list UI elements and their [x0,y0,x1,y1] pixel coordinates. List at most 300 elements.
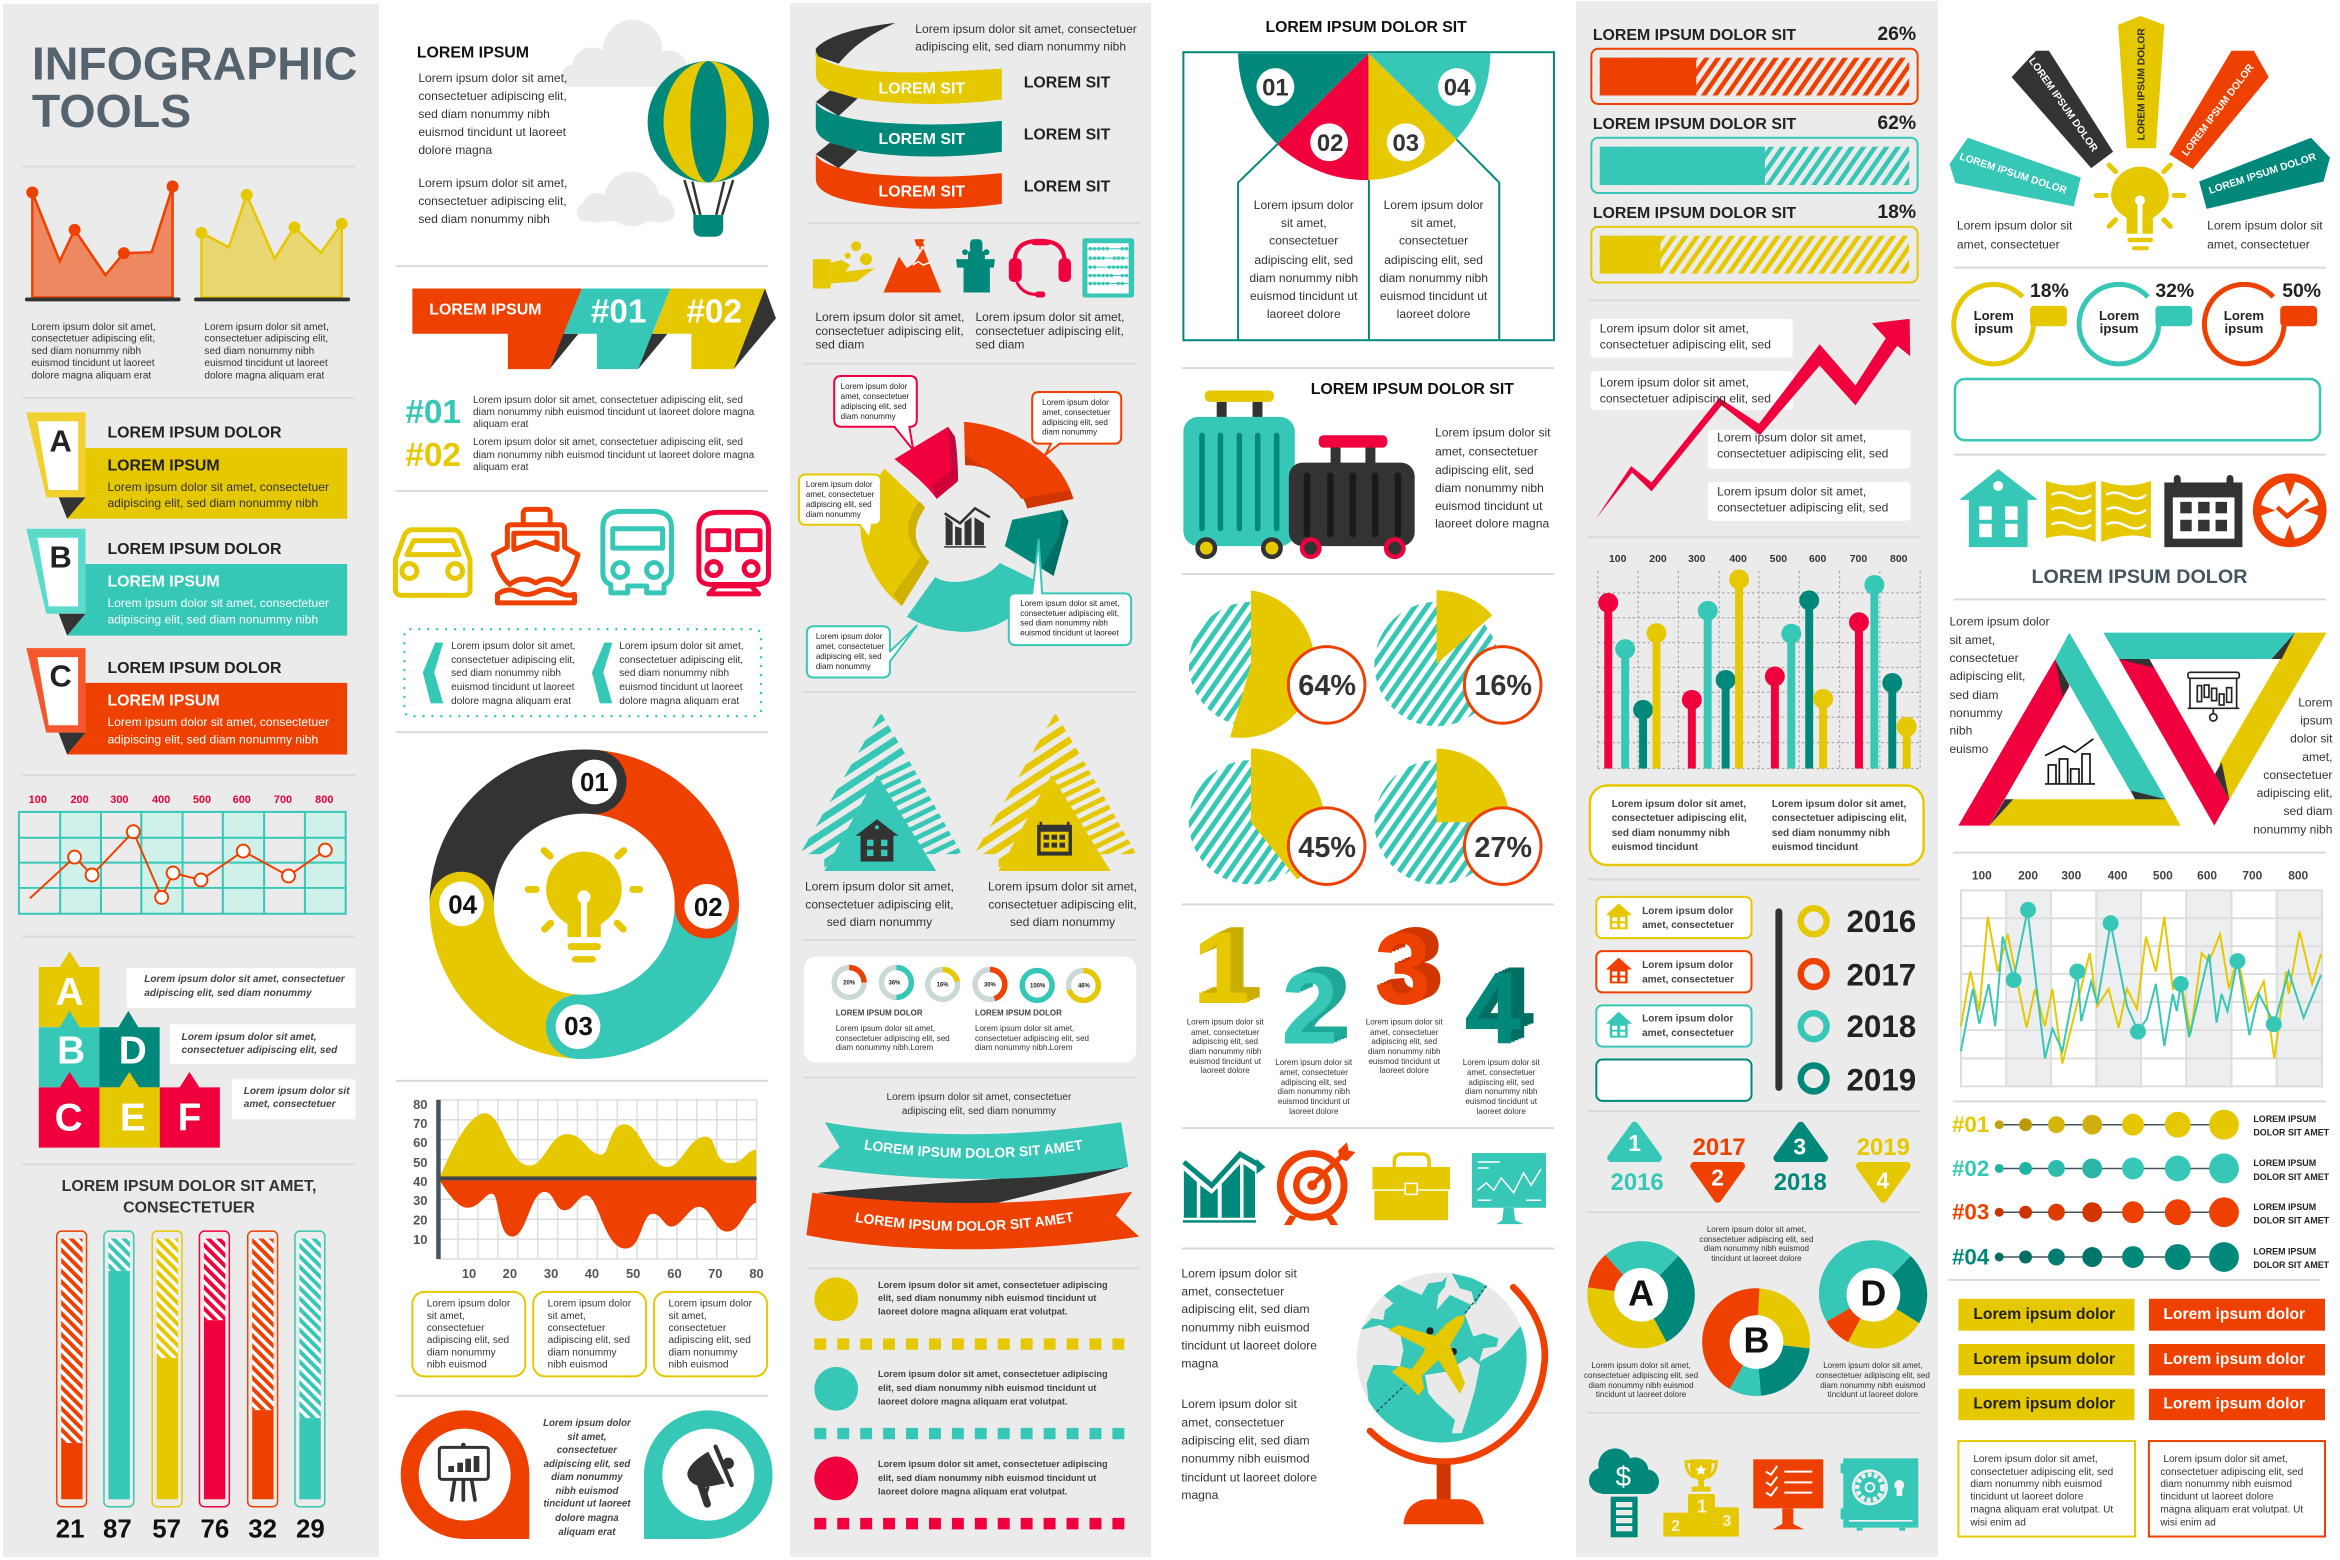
text block: #01 #02: aliquam erat [473,462,529,473]
text: triangle captions: sed diam nonummy [1010,915,1116,929]
text box: yellow outline wide: Lorem ipsum dolor sit amet, [1612,799,1746,810]
ribbon: lorem ipsum #01 #02 [412,288,776,369]
area chart: mirrored yellow and red: 80 [749,1266,764,1281]
numbered steps: 3D numerals: Lorem ipsum dolor sit [1187,1018,1264,1027]
icon: calendar [1037,822,1072,856]
bar chart: vertical striped bars: 76 [200,1516,229,1544]
text boxes: yellow outlined: diam nonummy [427,1347,497,1358]
icon: teal suitcase [1183,390,1295,559]
donut B [1702,1288,1810,1396]
callouts: ring labels: Lorem ipsum dolor sit amet, [1020,599,1120,608]
lollipop chart: 500 [1770,554,1787,565]
year triangles: 1 [1628,1130,1641,1156]
callouts: ring labels: amet, consectetuer [816,642,885,651]
icon: cloud with dollar and ladder: $ [1616,1461,1632,1492]
line chart: yellow and teal [1961,868,2322,1086]
panel: semicircle pie: euismod tincidunt ut [1380,289,1488,303]
text: area chart captions: consectetuer adipiscing elit, [31,334,155,345]
icon: car [395,530,470,595]
numbered steps: 3D numerals: Lorem ipsum dolor sit [1463,1058,1540,1067]
text: between pins: dolore magna [555,1513,619,1524]
fan of labels around bulb: amet, consectetuer [1957,238,2060,252]
text: donut captions: consectetuer adipiscing elit, sed [1584,1371,1698,1380]
buttons: red: Lorem ipsum dolor [2163,1396,2305,1413]
callouts: ring labels: diam nonummy [806,510,861,519]
numbered steps: 3D numerals: 3 [1374,912,1431,1026]
icon: open book [2046,481,2151,542]
panel: small donuts: LOREM IPSUM DOLOR [836,1008,923,1017]
panel: semicircle pie: consectetuer [1399,234,1468,248]
panel: semicircle pie: 02 [1317,130,1343,157]
numbered steps: 3D numerals: adipiscing elit, sed [1468,1078,1534,1087]
text: triangle captions: Lorem ipsum dolor sit amet, [805,879,954,893]
lollipop chart [1598,554,1920,768]
ribbon: lorem ipsum #01 #02: #02 [686,293,742,330]
numbered steps: 3D numerals: amet, consectetuer [1191,1028,1260,1037]
tile: lower columns 5 and 6 [1584,785,2330,1537]
panel: semicircle pie: laoreet dolore [1397,307,1471,321]
panel: small donuts: Lorem ipsum dolor sit amet, [975,1024,1074,1033]
area chart: mirrored yellow and red: 30 [413,1193,427,1208]
text boxes: yellow outlined: diam nonummy [548,1347,617,1358]
note box: red: magna aliquam erat volutpat. Ut [2160,1505,2303,1516]
text: spiral ribbon intro: adipiscing elit, sed diam nonummy nibh [915,40,1126,54]
timeline: #04: LOREM IPSUM [2253,1247,2316,1257]
chart: letter blocks: D [119,1030,147,1073]
donut D [1819,1240,1927,1349]
text: balloon description: sed diam nonummy nibh [418,212,550,226]
text: triangle right: sed diam [2283,804,2332,818]
panel: dotted box with chevrons: euismod tincidunt ut laoreet [451,682,575,693]
heading: luggage: LOREM IPSUM DOLOR SIT [1311,381,1514,398]
text: donuts top: diam nonummy nibh euismod [1704,1244,1809,1253]
text: area chart captions: dolore magna aliquam erat [204,371,325,382]
callouts: ring labels: adipiscing elit, sed [1042,418,1108,427]
note box: red: consectetuer adipiscing elit, sed [2160,1467,2303,1478]
numbered steps: 3D numerals: euismod tincidunt ut [1278,1097,1350,1106]
icon: train [699,512,768,594]
numbered steps: 3D numerals: 2 [1281,952,1338,1066]
text boxes and rising arrow: Lorem ipsum dolor sit amet, [1600,321,1749,335]
numbered steps: 3D numerals: 1 [1203,906,1259,1020]
panel: small donuts: 100% [1030,983,1046,989]
icon: clock [2257,478,2323,543]
area chart: mirrored yellow and red: 30 [544,1266,558,1281]
text: globe description: Lorem ipsum dolor sit [1181,1397,1298,1411]
text: between pins: tincidunt ut laoreet [543,1499,631,1510]
list: house labels: amet, consectetuer [1642,974,1734,985]
progress bars: 26% [1877,23,1916,45]
bar chart: vertical striped bars: 29 [296,1516,325,1544]
callouts: ring labels: diam nonummy [1042,428,1097,437]
callouts: ring labels: adipiscing elit, sed [806,500,872,509]
panel: small donuts: LOREM IPSUM DOLOR [975,1008,1062,1017]
numbered steps: 3D numerals: adipiscing elit, sed [1192,1037,1258,1046]
numbered steps: 3D numerals: euismod tincidunt ut [1465,1097,1538,1106]
numbered steps: 3D numerals: amet, consectetuer [1467,1068,1536,1077]
text box: yellow outline wide: sed diam nonummy nibh [1612,828,1730,839]
text: luggage: laoreet dolore magna [1435,517,1550,531]
area chart: mirrored yellow and red: 10 [413,1232,427,1247]
text: triangle left: nonummy [1949,706,2003,720]
text box: yellow outline wide: euismod tincidunt [1772,842,1859,853]
text boxes and rising arrow: Lorem ipsum dolor sit amet, [1717,484,1866,498]
text: banner intro: adipiscing elit, sed diam nonummy [902,1106,1057,1117]
numbered steps: 3D numerals: 2 [1294,946,1351,1060]
icon: trophy podium: 2 [1671,1518,1680,1535]
list: house labels: amet, consectetuer [1642,920,1734,931]
text block: #01 #02: #01 [405,394,461,431]
callouts: ring labels: diam nonummy [841,412,896,421]
text: area chart captions: Lorem ipsum dolor sit amet, [31,322,156,333]
chart: letter blocks: C [55,1097,83,1140]
text boxes: yellow outlined: adipiscing elit, sed [669,1335,751,1346]
text: between pins: aliquam erat [558,1527,616,1538]
callouts: ring labels: sed diam nonummy nibh [1020,619,1108,628]
numbered steps: 3D numerals: 1 [1196,909,1253,1023]
icon: calendar large [2164,475,2242,547]
note box: red: Lorem ipsum dolor sit amet, [2163,1454,2288,1465]
gauge: 50%: ipsum [2225,321,2263,336]
numbered steps: 3D numerals: 4 [1464,952,1521,1066]
icon: abacus [1082,238,1134,297]
panel: dotted box with chevrons: Lorem ipsum dolor sit amet, [619,641,744,652]
text boxes and rising arrow [1590,319,1911,521]
year triangles: 3 [1793,1134,1806,1160]
ribbon stack: lorem sit: LOREM SIT [878,183,965,200]
gauge: 32% [2079,280,2194,364]
text: triangle right: ipsum [2300,714,2332,728]
panel: dotted box with chevrons: dolore magna aliquam erat [619,696,739,707]
ribbon stack: lorem sit: LOREM SIT [1024,75,1111,92]
text: globe description: amet, consectetuer [1181,1416,1284,1430]
panel: option C: adipiscing elit, sed diam nonummy nibh [107,733,318,747]
panel: small donuts: consectetuer adipiscing elit, sed [836,1034,950,1043]
text: triangle captions: consectetuer adipiscing elit, [988,897,1137,911]
panel: dotted box with chevrons [404,629,761,716]
icon: house [856,819,898,862]
area chart: mirrored yellow and red: 50 [626,1266,640,1281]
progress bars: LOREM IPSUM DOLOR SIT [1593,205,1796,222]
icon: hand with coins [813,241,875,288]
text: donut captions [1584,1361,1930,1399]
numbered steps: 3D numerals: 3 [1381,909,1438,1023]
panel: small donuts: 20% [843,980,856,986]
icon: clouds [562,20,689,226]
year triangles: 2 [1711,1164,1724,1190]
numbered steps: 3D numerals: diam nonummy nibh [1189,1047,1261,1056]
icon: hot air balloon [648,61,769,237]
panel: small donuts: 16% [937,982,949,988]
list: coloured circles with dashes: Lorem ipsum dolor sit amet, consectetuer adipiscing [878,1280,1108,1290]
banners: curved ribbons: LOREM IPSUM DOLOR SIT AMET [864,1140,1082,1158]
ribbon stack: lorem sit: LOREM SIT [878,131,965,148]
note box: yellow: consectetuer adipiscing elit, sed [1970,1467,2113,1478]
area chart: mirrored yellow and red: 70 [708,1266,722,1281]
text: between pins: diam nonummy [551,1472,623,1483]
pie chart: 27% [1374,749,1541,884]
fan of labels around bulb: LOREM IPSUM DOLOR [2026,56,2100,155]
panel: semicircle pie: euismod tincidunt ut [1250,289,1358,303]
timeline: #03: #03 [1952,1200,1989,1225]
text: icon captions [815,310,1125,352]
panel: semicircle pie: laoreet dolore [1267,307,1341,321]
text: spiral ribbon intro: Lorem ipsum dolor sit amet, consectetuer [915,22,1137,36]
numbered steps: 3D numerals: 2 [1291,947,1348,1061]
icon: light bulb [528,851,640,963]
text boxes: letter blocks: Lorem ipsum dolor sit [244,1086,350,1097]
panel: option B [26,529,347,636]
text: triangle right: nonummy nibh [2253,823,2332,837]
bar chart: vertical striped bars: 87 [103,1516,132,1544]
text: globe description: nonummy nibh euismod [1181,1451,1310,1465]
text: balloon description: consectetuer adipiscing elit, [418,89,567,103]
text: luggage: euismod tincidunt ut [1435,499,1543,513]
text: icon captions: sed diam [815,338,864,352]
numbered steps: 3D numerals: 4 [1474,947,1531,1061]
text: triangle left: adipiscing elit, [1949,669,2025,683]
panel: small donuts: diam nonummy nibh.Lorem [836,1043,934,1052]
donut A [1587,1241,1695,1348]
text: area chart captions: dolore magna aliquam erat [31,371,151,382]
text: area chart captions: euismod tincidunt ut laoreet [204,358,328,369]
progress bars: 62% [1877,112,1916,134]
text boxes: yellow outlined: adipiscing elit, sed [548,1335,630,1346]
icon: small bulb [2096,165,2184,250]
buttons: yellow: Lorem ipsum dolor [1973,1306,2115,1323]
panel: semicircle pie: adipiscing elit, sed [1384,253,1483,267]
list: coloured circles with dashes: Lorem ipsum dolor sit amet, consectetuer adipiscing [878,1459,1108,1469]
buttons: yellow: Lorem ipsum dolor [1973,1351,2115,1368]
panel: option C: C [50,658,72,693]
heading: lorem ipsum balloon text: LOREM IPSUM [417,45,529,62]
lollipop chart: 300 [1688,554,1706,565]
area chart: mirrored yellow and red [413,1097,764,1281]
note box: red [2149,1441,2325,1537]
timeline: #04: DOLOR SIT AMET [2253,1260,2330,1270]
text: area chart captions: consectetuer adipiscing elit, [204,334,328,345]
line chart: red on teal grid: 300 [110,794,129,806]
text boxes: yellow outlined: nibh euismod [427,1359,487,1370]
pie chart: 45% [1189,749,1365,884]
text boxes and rising arrow: consectetuer adipiscing elit, sed [1717,447,1888,461]
lollipop chart: 600 [1809,554,1827,565]
numbered steps: 3D numerals: adipiscing elit, sed [1281,1078,1347,1087]
text: luggage: adipiscing elit, sed [1435,463,1534,477]
text: luggage: amet, consectetuer [1435,445,1538,459]
text boxes: yellow outlined: Lorem ipsum dolor [427,1299,511,1310]
panel: option C: Lorem ipsum dolor sit amet, consectetuer [107,715,329,729]
pie chart: 16%: 16% [1474,670,1532,702]
line chart: yellow and teal: 400 [2108,868,2128,882]
text: luggage: diam nonummy nibh [1435,481,1544,495]
panel: small donuts: 30% [984,982,997,988]
gauge: 32%: ipsum [2100,321,2138,336]
panel: semicircle pie: Lorem ipsum dolor [1384,198,1484,212]
text: triangle right: dolor sit [2290,732,2333,746]
text: balloon description: dolore magna [418,143,492,157]
callouts: ring labels: Lorem ipsum dolor [841,382,908,391]
panel: small donuts: Lorem ipsum dolor sit amet, [836,1024,935,1033]
text: area chart captions: Lorem ipsum dolor sit amet, [204,322,329,333]
panel: dotted box with chevrons: consectetuer adipiscing elit, [619,655,743,666]
empty teal box [1955,379,2320,440]
note box: yellow: magna aliquam erat volutpat. Ut [1970,1505,2113,1516]
ribbon: lorem ipsum #01 #02: #01 [591,293,647,330]
text: icon captions: Lorem ipsum dolor sit amet, [975,310,1125,324]
text box: yellow outline wide: consectetuer adipiscing elit, [1612,813,1747,824]
numbered steps: 3D numerals: laoreet dolore [1289,1107,1339,1116]
numbered steps: 3D numerals: laoreet dolore [1201,1066,1250,1075]
fan of labels around bulb: LOREM IPSUM DOLOR [2180,62,2257,158]
title: TOOLS [32,85,191,137]
year triangles: 2017 [1693,1134,1746,1161]
text: triangle left: sit amet, [1949,633,1995,647]
callouts: ring labels: amet, consectetuer [806,490,875,499]
text: donuts top: Lorem ipsum dolor sit amet, [1707,1225,1806,1234]
panel: dotted box with chevrons: dolore magna aliquam erat [451,696,571,707]
note box: yellow: wisi enim ad [1969,1518,2026,1529]
panel: option A: LOREM IPSUM DOLOR [107,425,282,442]
area chart: mirrored yellow and red: 60 [413,1135,427,1150]
text: triangle right: Lorem [2298,695,2332,709]
text: between pins: sit amet, [567,1432,607,1443]
pie chart: 64%: 64% [1298,670,1356,702]
lollipop chart: 400 [1729,554,1747,565]
numbered steps: 3D numerals: amet, consectetuer [1370,1028,1439,1037]
text boxes and rising arrow: consectetuer adipiscing elit, sed [1717,500,1888,514]
line chart: yellow and teal: 600 [2197,868,2217,882]
ribbon stack: lorem sit: LOREM SIT [1024,126,1111,143]
buttons: yellow: Lorem ipsum dolor [1973,1396,2115,1413]
line chart: red on teal grid: 700 [274,794,292,806]
text: between pins: nibh euismod [555,1486,619,1497]
line chart: red on teal grid: 100 [29,794,47,806]
panel: small donuts: 46% [1078,983,1091,989]
bar chart: vertical striped bars: 57 [152,1516,181,1544]
icon: presentation pin [401,1410,529,1539]
text box: yellow outline wide [1590,785,1924,865]
list: coloured circles with dashes: laoreet dolore magna aliquam erat volutpat. [878,1397,1067,1407]
timeline: #02: DOLOR SIT AMET [2253,1172,2330,1182]
text: triangle right: amet, [2302,750,2332,764]
text boxes and rising arrow: consectetuer adipiscing elit, sed [1600,391,1771,405]
numbered steps: 3D numerals: 4 [1471,949,1528,1063]
numbered steps: 3D numerals: 2 [1288,949,1345,1063]
numbered steps: 3D numerals: 2 [1285,950,1342,1064]
list: house labels: Lorem ipsum dolor [1642,906,1733,917]
list: coloured circles with dashes [814,1277,1125,1524]
timeline: #02: LOREM IPSUM [2253,1158,2316,1168]
text: globe description: amet, consectetuer [1181,1284,1284,1298]
callouts: ring labels: adipiscing elit, sed [841,402,906,411]
text: triangle left: sed diam [1949,688,1998,702]
panel: small donuts: 36% [888,980,901,986]
text boxes: yellow outlined: sit amet, [427,1311,465,1322]
numbered steps: 3D numerals: 4 [1477,946,1534,1060]
text: area chart captions [31,322,329,382]
callouts: ring labels: diam nonummy [816,662,871,671]
bar chart: vertical striped bars [56,1231,325,1544]
callouts: ring labels: adipiscing elit, sed [816,652,882,661]
timeline: years: 2018 [1847,1009,1916,1044]
donut chart with bulb [430,750,739,1059]
year triangles: 4 [1876,1167,1889,1193]
text: balloon description: consectetuer adipiscing elit, [418,194,567,208]
timeline: #03: DOLOR SIT AMET [2253,1216,2330,1226]
text: triangle captions: sed diam nonummy [827,915,933,929]
numbered steps: 3D numerals: 3 [1384,907,1441,1021]
icon: candlestick board [2188,672,2239,721]
panel: option A: adipiscing elit, sed diam nonummy nibh [107,496,318,510]
icon: headset [1009,240,1071,297]
gauge: 18%: ipsum [1974,321,2013,336]
chart: letter blocks [39,951,220,1148]
text box: yellow outline wide: euismod tincidunt [1612,842,1699,853]
area chart: red [25,181,181,301]
callouts: ring labels: amet, consectetuer [841,392,909,401]
note box: yellow: Lorem ipsum dolor sit amet, [1973,1454,2098,1465]
ribbon: lorem ipsum #01 #02: LOREM IPSUM [429,301,541,318]
panel: dotted box with chevrons: sed diam nonummy nibh [451,668,561,679]
icon: globe with plane [1340,1273,1545,1524]
list: coloured circles with dashes: elit, sed diam nonummy nibh euismod tincidunt ut [878,1473,1096,1483]
numbered steps: 3D numerals: laoreet dolore [1380,1066,1429,1075]
heading: bars: LOREM IPSUM DOLOR SIT AMET, [62,1178,316,1195]
line chart: yellow and teal: 200 [2018,868,2038,882]
panel: option B: Lorem ipsum dolor sit amet, consectetuer [107,596,329,610]
panel: dotted box with chevrons: euismod tincidunt ut laoreet [619,682,743,693]
numbered steps: 3D numerals: Lorem ipsum dolor sit [1275,1058,1353,1067]
text boxes: yellow outlined: diam nonummy [669,1347,738,1358]
text boxes and rising arrow: Lorem ipsum dolor sit amet, [1717,431,1866,445]
panel: semicircle pie: 01 [1262,75,1289,102]
panel: small donuts [804,957,1136,1063]
icon: ring center bar chart [944,508,990,548]
text block: #01 #02: Lorem ipsum dolor sit amet, consectetuer adipiscing elit, sed [473,437,743,448]
text: globe description: adipiscing elit, sed diam [1181,1434,1310,1448]
numbered steps: 3D numerals [1187,905,1540,1116]
callouts: ring labels: euismod tincidunt ut laoreet [1020,629,1119,638]
callouts: ring labels: Lorem ipsum dolor [806,480,873,489]
numbered steps: 3D numerals: 4 [1468,950,1525,1064]
gauge: 32%: Lorem [2099,308,2139,323]
text boxes: letter blocks: amet, consectetuer [244,1099,337,1110]
ribbon stack: lorem sit: LOREM SIT [1024,178,1111,195]
text: triangle left: euismo [1949,742,1989,756]
timeline: #04 [1952,1242,2330,1272]
numbered steps: 3D numerals: 1 [1200,908,1257,1022]
list: coloured circles with dashes: elit, sed diam nonummy nibh euismod tincidunt ut [878,1383,1096,1393]
buttons: yellow [1958,1299,2134,1420]
panel: dotted box with chevrons: sed diam nonummy nibh [619,668,729,679]
text: between pins: adipiscing elit, sed [544,1459,631,1470]
buttons: red: Lorem ipsum dolor [2163,1351,2305,1368]
text: donut captions: consectetuer adipiscing elit, sed [1816,1371,1930,1380]
text box: yellow outline wide: sed diam nonummy nibh [1772,828,1890,839]
text block: #01 #02: aliquam erat [473,419,529,430]
bar chart: vertical striped bars: 32 [248,1516,277,1544]
icon: monitor [1472,1153,1546,1224]
chart: letter blocks: E [120,1097,146,1140]
timeline: #02: #02 [1952,1156,1989,1181]
text: donut captions: diam nonummy nibh euismod [1589,1381,1694,1390]
line chart: red on teal grid: 200 [70,794,89,806]
icon: safe [1841,1458,1918,1531]
text: triangle left: consectetuer [1949,651,2019,665]
lollipop chart: 100 [1609,554,1627,565]
text: area chart captions: sed diam nonummy nibh [204,346,314,357]
